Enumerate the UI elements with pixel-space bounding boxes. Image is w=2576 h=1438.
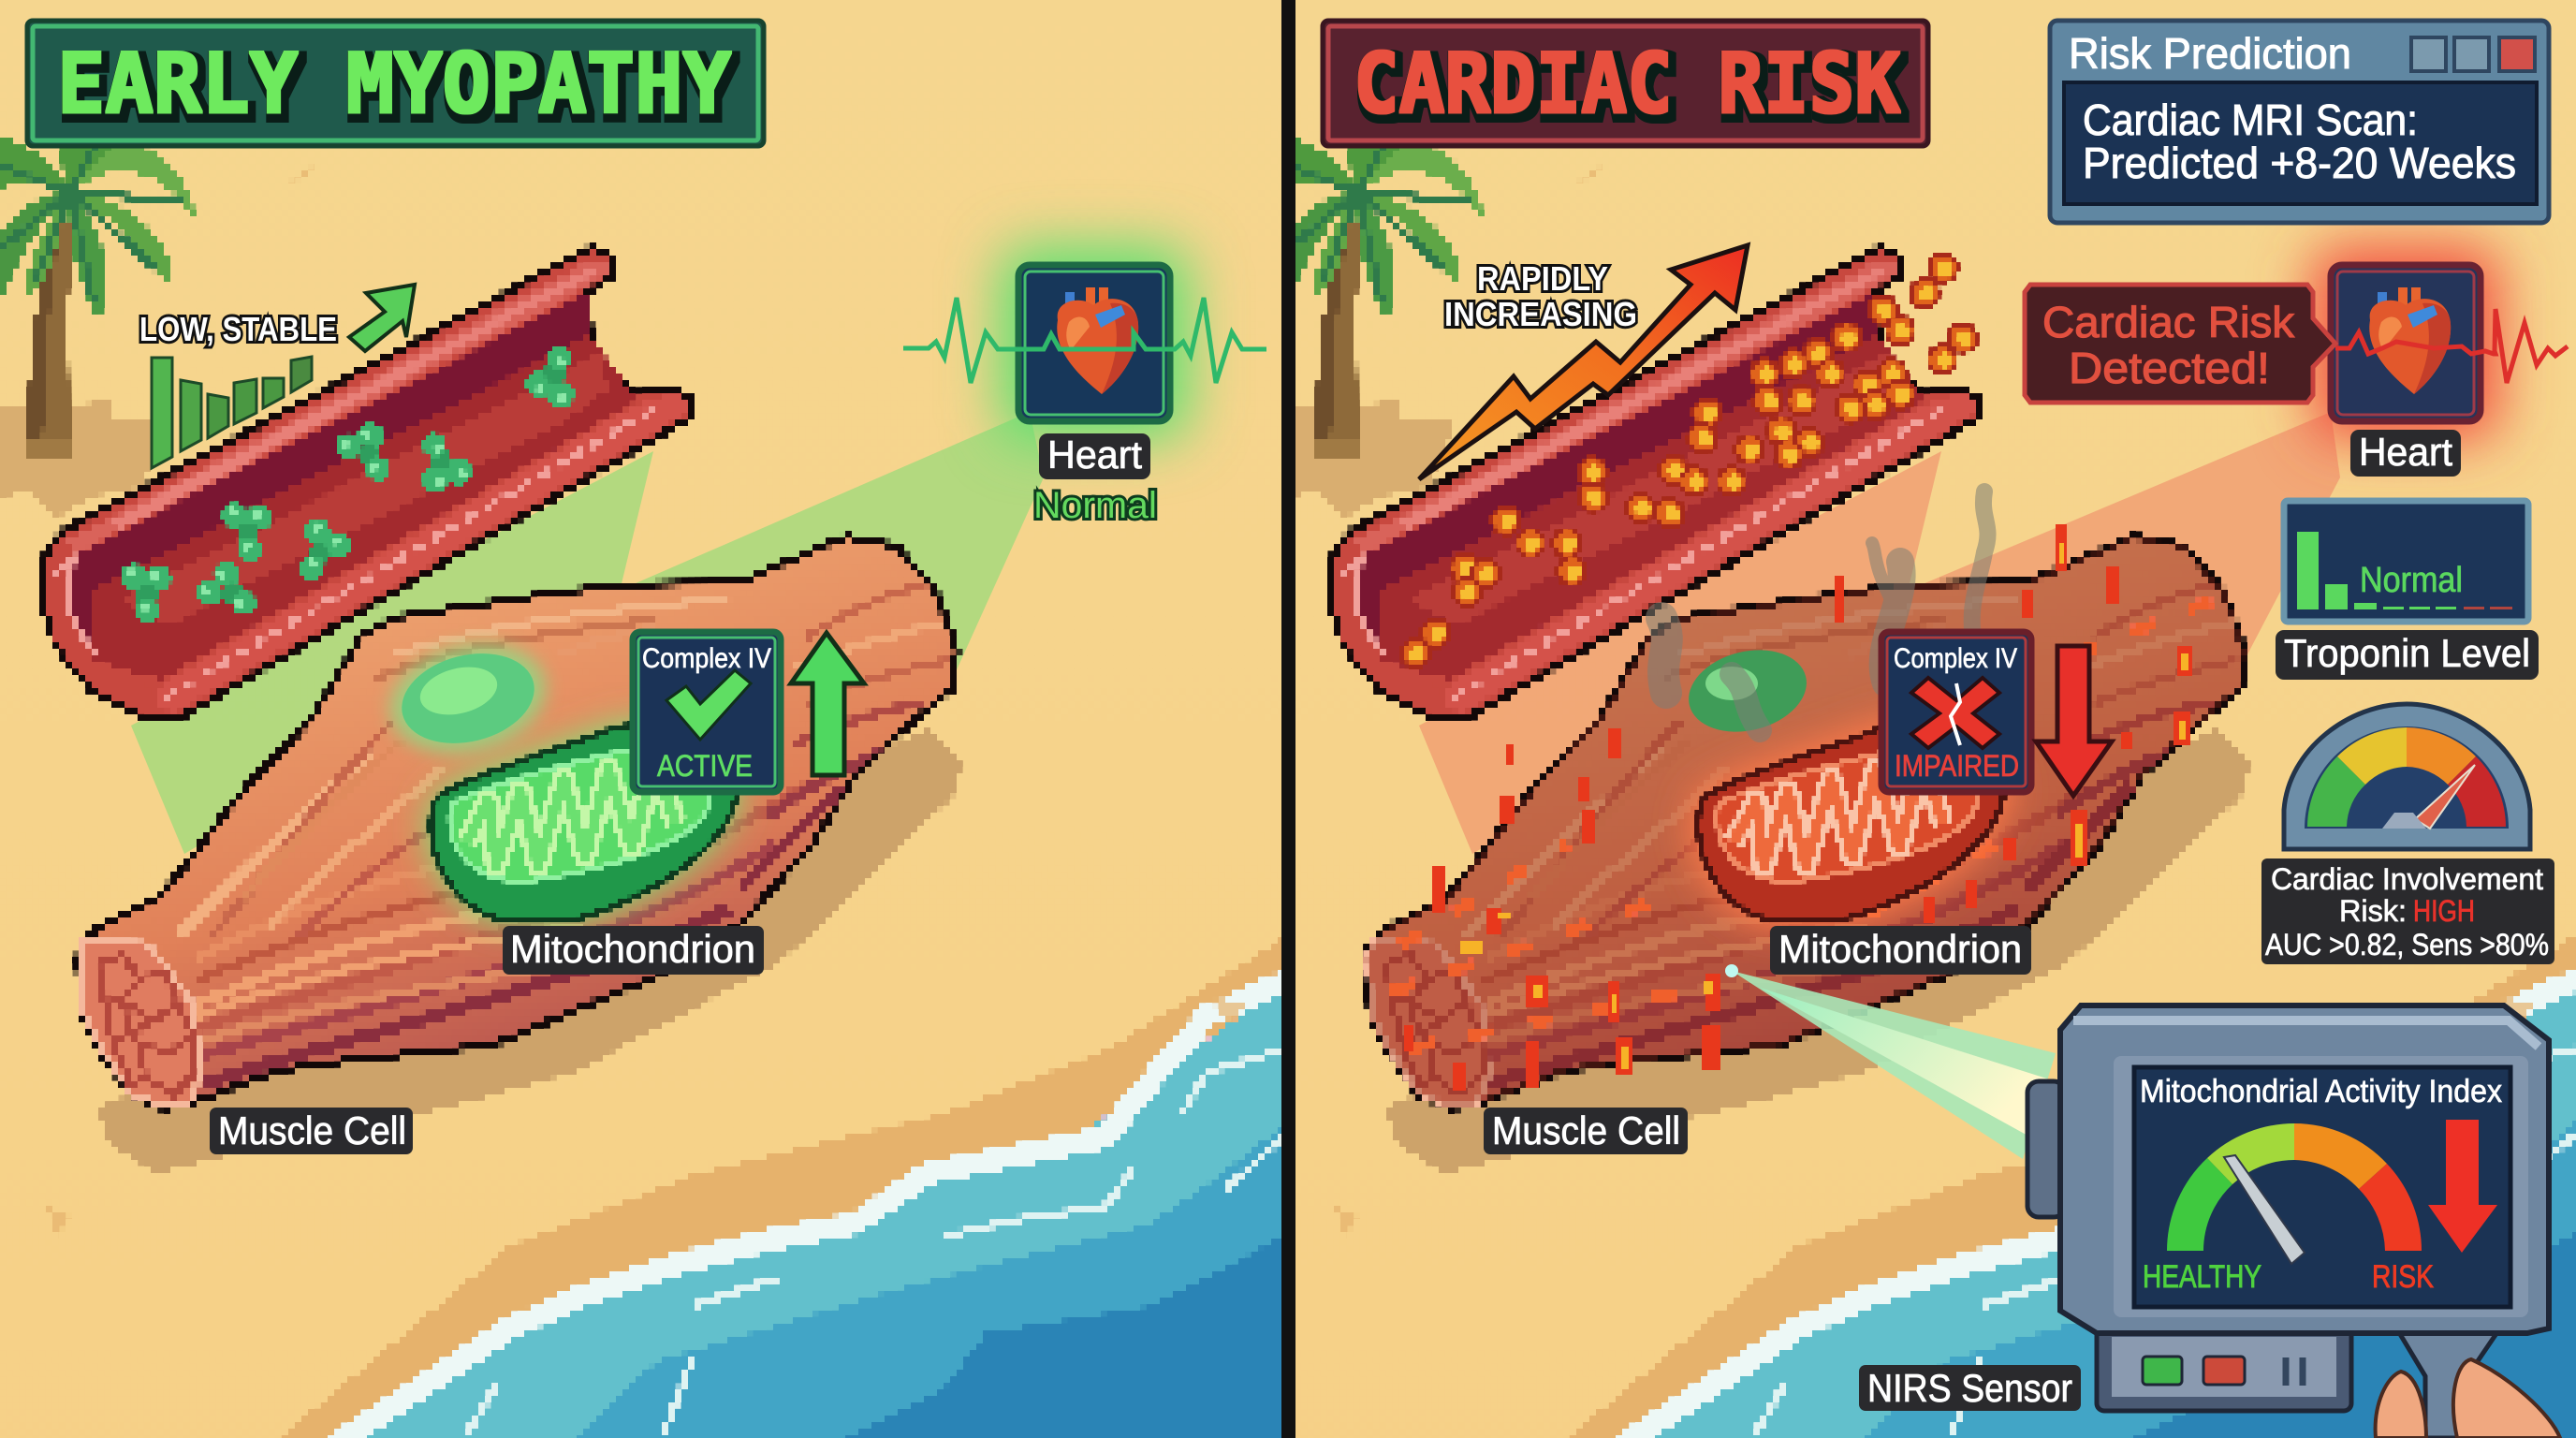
fire embers <box>1404 524 2192 1091</box>
green up-right arrow <box>349 285 415 351</box>
panel: cardiac risk <box>1260 0 2576 1438</box>
icon: red x <box>1911 678 1999 748</box>
rapidly increasing label <box>1444 259 1637 333</box>
center divider <box>1281 0 1295 1438</box>
cardiac involvement info: Cardiac Involvement <box>2271 862 2543 896</box>
cardiac involvement info: HIGH <box>2413 894 2475 928</box>
label: heart: Heart <box>2359 430 2452 474</box>
ecg trace, normal <box>903 298 1266 383</box>
red down arrow <box>2428 1120 2497 1253</box>
mitochondrial activity gauge <box>2167 1123 2422 1264</box>
cardiac involvement info <box>2261 858 2554 964</box>
complex iv impaired badge <box>1881 632 2031 792</box>
label: troponin level: Troponin Level <box>2284 631 2530 675</box>
complex iv active badge <box>633 632 781 792</box>
label: mitochondrion: Mitochondrion <box>510 927 755 971</box>
muscle cell <box>78 536 957 1108</box>
icon: check mark <box>666 670 751 740</box>
mitochondrion glow <box>1698 725 2003 920</box>
mitochondrion <box>431 725 736 920</box>
green up arrow <box>791 633 864 775</box>
beam: muscle to heart <box>1887 412 2340 674</box>
callout: cardiac risk detected <box>2025 285 2335 403</box>
muscle shadow <box>98 728 961 1173</box>
window buttons <box>2411 37 2535 71</box>
complex iv impaired badge: Complex IV <box>1894 643 2017 674</box>
label: muscle cell: Muscle Cell <box>218 1108 406 1152</box>
troponin bars <box>2297 532 2456 609</box>
label: mitochondrion: Mitochondrion <box>1778 927 2022 971</box>
callout: cardiac risk detected: Cardiac Risk <box>2042 298 2295 346</box>
nucleus <box>379 628 557 769</box>
title: cardiac risk: CARDIAC RISK <box>1354 36 1900 132</box>
zigzag rising arrow <box>1419 245 1748 479</box>
heart glow <box>2312 246 2499 440</box>
cardiac involvement info: AUC >0.82, Sens >80% <box>2265 928 2549 961</box>
blood vessel <box>1329 247 1978 719</box>
ecg trace, abnormal <box>2335 309 2568 383</box>
device lower control unit <box>2097 1325 2351 1411</box>
window: risk prediction: Risk Prediction <box>2069 29 2351 78</box>
nucleus, dim <box>1680 638 1815 743</box>
nirs sensor device <box>2027 1005 2560 1438</box>
cardiac involvement info: Risk: <box>2339 894 2407 928</box>
blood vessel <box>41 247 690 719</box>
title: early myopathy: EARLY MYOPATHY <box>57 36 731 132</box>
beach background <box>1288 0 2576 1438</box>
label: muscle cell: Muscle Cell <box>1492 1108 1680 1152</box>
low stable trend label: LOW, STABLE <box>139 310 337 348</box>
complex iv active badge: Complex IV <box>642 643 771 674</box>
palm tree <box>0 136 197 518</box>
mitochondrion, damaged <box>1698 725 2003 920</box>
mitochondrion glow <box>431 725 736 920</box>
icon: heart <box>1057 287 1138 394</box>
device handle <box>2397 1329 2499 1438</box>
device body <box>2060 1005 2549 1333</box>
callout: cardiac risk detected: Detected! <box>2069 344 2270 392</box>
panel: early myopathy <box>0 0 1292 1438</box>
status: normal: Normal <box>1033 485 1157 526</box>
window: risk prediction: Predicted +8-20 Weeks <box>2083 139 2516 187</box>
nirs sensor device: RISK <box>2372 1259 2434 1295</box>
heart tile <box>2331 265 2481 421</box>
complex iv active badge: ACTIVE <box>657 749 753 783</box>
troponin screen: Normal <box>2360 561 2463 600</box>
icon: heart <box>2369 287 2451 394</box>
smoke wisps <box>1661 492 1988 730</box>
device screen <box>2134 1067 2510 1307</box>
biomarker clusters, low <box>121 339 589 631</box>
red down arrow <box>2036 646 2112 796</box>
biomarker particles, rising <box>1401 254 1977 668</box>
window: risk prediction: Cardiac MRI Scan: <box>2083 95 2418 144</box>
cardiac risk gauge <box>2284 704 2530 849</box>
device side knob <box>2027 1081 2065 1217</box>
beam: vessel to muscle <box>1419 451 1941 854</box>
nirs sensor device: Mitochondrial Activity Index <box>2140 1074 2502 1109</box>
complex iv impaired badge: IMPAIRED <box>1895 749 2019 783</box>
heart glow <box>1000 246 1189 440</box>
nirs light beam <box>1725 964 2056 1159</box>
muscle cell, damaged <box>1344 524 2280 1123</box>
muscle shadow <box>1386 728 2249 1173</box>
rapidly increasing label: RAPIDLY <box>1477 259 1608 298</box>
label: nirs sensor: NIRS Sensor <box>1867 1366 2072 1410</box>
nirs sensor device: HEALTHY <box>2143 1259 2261 1295</box>
heart tile <box>1018 265 1170 421</box>
beam: muscle to heart <box>636 418 1043 670</box>
beach background <box>0 0 1292 1438</box>
beam: vessel to muscle <box>131 451 653 854</box>
window: risk prediction <box>2050 21 2549 223</box>
label: heart: Heart <box>1047 433 1142 477</box>
biomarker bars <box>152 357 312 468</box>
palm tree <box>1260 136 1485 518</box>
hand fingers <box>2376 1359 2560 1438</box>
troponin screen <box>2284 501 2528 622</box>
rapidly increasing label: INCREASING <box>1444 295 1637 333</box>
